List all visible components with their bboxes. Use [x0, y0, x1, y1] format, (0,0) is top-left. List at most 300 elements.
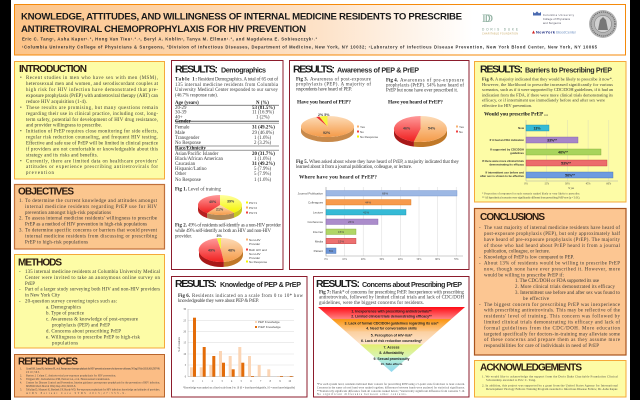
figure 8 caption: effective for HIV prevention.: [482, 103, 532, 108]
pie chart: heard of PrEP: Have you heard of PrEP?: [388, 100, 443, 106]
introduction bullets: strategy and its risks and benefits.: [26, 153, 98, 158]
references list: 3.: [20, 378, 22, 381]
pie chart: heard of PEP: Yes: [360, 125, 365, 129]
bar chart: knowledge scale: 20: [183, 330, 187, 334]
pie chart: heard of PEP: No: [360, 130, 364, 134]
introduction bullets: attitudes or experience prescribing antiretrovirals for: [26, 165, 158, 170]
heading: results concerns: [316, 278, 462, 290]
table 1 demographics: 11 (16.9%): [252, 110, 274, 116]
methods list: a. Demographics: [46, 306, 81, 310]
pie chart: heard of PrEP: 46%: [403, 126, 411, 130]
figure 3 caption: [296, 78, 371, 92]
logo: university seal: [589, 10, 617, 38]
bar chart: where heard of PrEP: Patient: [314, 249, 323, 253]
logo: Columbia: and Surgeons: [543, 22, 562, 25]
bar chart: would prescribe PrEP: % yes: [568, 187, 574, 190]
bar chart: would prescribe PrEP: [480, 112, 618, 200]
heading: methods: METHODS: [18, 258, 62, 268]
figure 2 caption: Fig 2.: [175, 224, 187, 228]
bar chart: where heard of PrEP: Journal Publication: [298, 192, 323, 196]
panel: results barriers: [474, 62, 626, 202]
acknowledgements text: Scholarship awarded to Eric C. Tang.: [486, 378, 536, 382]
conclusions text: About 13% of residents would be willing to prescribe PrEP: [484, 262, 620, 266]
figure 8 caption: [482, 76, 614, 108]
conclusions text: residents' level of training. This concern was followed by: [484, 315, 621, 320]
table 1 demographics: Caucasian: [175, 162, 196, 167]
methods list: 135 internal medicine residents at Columbia University Medical: [25, 270, 161, 275]
panel: methods: [14, 254, 164, 348]
heading: results awareness: RESULTS:: [293, 64, 335, 76]
heading: results demographics: [175, 64, 266, 76]
objectives list: prevention amongst high-risk populations: [25, 211, 111, 216]
bar chart: where heard of PrEP: Colleagues: [308, 200, 323, 204]
table 1 demographics: N (%): [256, 101, 269, 106]
heading: results barriers: RESULTS:: [480, 64, 523, 76]
panel: acknowledgements: [474, 360, 626, 397]
panel: references: [14, 354, 164, 397]
figure 7 footnote: *For each system level, residents indicated their concern for prescribing PrEP using a 5-point scale from most to least concern.: [317, 383, 465, 386]
table 1 caption: [175, 78, 279, 98]
conclusions text: The vast majority of internal medicine residents have heard of: [484, 226, 620, 231]
introduction bullets: Initiation of PrEP requires close monitoring for side effects,: [26, 130, 158, 134]
introduction bullets: Recent studies in men who have sex with men (MSM),: [26, 76, 158, 81]
bar chart: where heard of PrEP: 44%: [365, 200, 371, 204]
heading: acknowledgements: ACKNOWLEDGEMENTS: [480, 362, 582, 374]
funnel: ranked concerns: 1. Inexperience with prescribing antiretrovirals**: [351, 310, 432, 314]
conclusions text: 2. More clinical trials demonstrated its efficacy: [515, 285, 616, 290]
table 1 demographics: 5 (7.9%): [254, 172, 271, 177]
pie chart: level of training: [198, 195, 257, 220]
panel: introduction: [14, 62, 164, 179]
heading: conclusions: CONCLUSIONS: [480, 212, 545, 223]
methods list: d. Concerns about prescribing PrEP: [46, 330, 121, 334]
references list: 4.: [20, 382, 22, 384]
references list: [20, 368, 160, 395]
bar chart: knowledge scale: 5: [185, 364, 187, 367]
references list: 2.: [20, 374, 22, 378]
introduction bullets: reduce HIV acquisition (1-4).: [26, 100, 87, 105]
bar chart: would prescribe PrEP: 33%**: [547, 138, 558, 142]
bar chart: where heard of PrEP: 15%: [338, 239, 344, 243]
table 1 demographics: Gender: [175, 120, 192, 124]
bar chart: would prescribe PrEP: 46%**: [558, 150, 568, 154]
objectives list: [19, 199, 158, 246]
funnel: ranked concerns: 5. Perception of HIV-risk*: [371, 334, 413, 338]
introduction bullets: •: [20, 76, 22, 81]
table 1 demographics: Black/African American: [175, 157, 223, 162]
heading: results concerns: RESULTS:: [316, 278, 360, 290]
figure 3 caption: prophylaxis (PEP). A majority of: [296, 82, 371, 88]
conclusions text: [479, 226, 621, 349]
figure 6 caption: Fig 6.: [178, 294, 190, 299]
introduction bullets: and provider willingness to prescribe.: [26, 124, 102, 129]
funnel: ranked concerns: 7. Access: [383, 346, 400, 350]
authors: Eric C. Tang¹, Asha Kapur¹˒², Hong Van Tieu¹˒²˒³, Beryl A. Koblin³, Tanya M. Ellman¹˒², and Magdalena E. Sobieszczyk¹˒²: [22, 36, 318, 42]
figure 2 caption: 49% of residents self-identify as a non-HIV provider: [188, 224, 281, 228]
logo: Doris Duke: [482, 11, 518, 36]
funnel: ranked concerns: [318, 307, 465, 372]
panel: results awareness: [290, 60, 469, 270]
pie chart: heard of PrEP: No: [459, 130, 463, 134]
bar chart: where heard of PrEP: Internet: [313, 230, 323, 234]
heading: results demographics: Demographics: [221, 66, 266, 74]
table 1 demographics: Male: [175, 131, 185, 136]
conclusions text: The biggest concern for prescribing PrEP was inexperience: [484, 303, 620, 308]
table 1 caption: (46.7% response rate).: [175, 93, 218, 98]
bar chart: knowledge scale: 5: [241, 380, 243, 383]
pie chart: provider type: Provider: [249, 242, 260, 246]
bar chart: knowledge scale: 3: [221, 380, 223, 383]
pie chart: heard of PrEP: 54%: [428, 126, 436, 130]
figure 2 caption: provider.: [175, 234, 192, 240]
panel: conclusions: [474, 208, 626, 355]
introduction bullets: •: [20, 130, 22, 134]
references list: Grant RM, Lama JR, Anderson PL, et al. Preexposure chemoprophylaxis for HIV prevention in men who have sex with men. N Engl J Med 2010;363:2587-99.: [26, 368, 160, 370]
panel: results demographics: [172, 60, 283, 270]
panel: objectives: [14, 184, 164, 249]
conclusions text: of these concerns and prepare them as they assume more: [484, 338, 620, 343]
table 1 demographics: No Response: [175, 141, 201, 146]
conclusions text: be effective: [523, 297, 549, 302]
pie chart: provider type: 3%: [216, 234, 222, 238]
figure 7 footnote: [317, 383, 465, 396]
conclusions text: with prescribing antiretrovirals. This may be reflective of the: [484, 309, 620, 314]
figure 4 caption: prophylaxis (PrEP). 54% have heard of: [386, 84, 464, 88]
methods list: populations: [52, 342, 78, 346]
bar chart: would prescribe PrEP: 13%: [533, 126, 541, 130]
figure 4 caption: [386, 78, 464, 94]
objectives list: 2.: [19, 217, 23, 222]
introduction bullets: These results are promising, but many questions remain: [26, 106, 159, 111]
objectives list: PrEP to high-risk populations: [25, 240, 88, 246]
pie chart: heard of PEP: 2% 5%: [318, 113, 330, 117]
figure 8 caption: Fig 8.: [482, 76, 494, 82]
methods list: in New York City: [25, 294, 61, 299]
bar chart: would prescribe PrEP: If intermittent use before and: [485, 170, 524, 174]
objectives list: internal medicine residents from discussing or prescribing: [25, 234, 158, 240]
table 1 demographics: Asian/Pacific Islander: [175, 152, 219, 157]
table 1 caption: University Medical Center responded to our survey: [175, 88, 279, 93]
funnel: ranked concerns: 6. Lack of risk reduction counseling*: [361, 339, 423, 343]
references list: Baeten J, Celum C. Antiretroviral pre-exposure prophylaxis for HIV prevention.: [26, 374, 116, 378]
pie chart: provider type: Both HIV and: [249, 248, 267, 252]
bar chart: knowledge scale: 10: [288, 380, 292, 383]
references list: Thigpen MC, Kebaabetswe PM, Paxton LA, et al. Heterosexual transmission.: [26, 378, 110, 381]
bar chart: where heard of PrEP: Media: [315, 239, 323, 243]
conclusions text: now, though none have ever prescribed it. However, more: [484, 267, 620, 272]
figure 3 caption: Fig 3.: [296, 78, 308, 82]
table 1 demographics: 31 (49.2%): [252, 126, 275, 130]
objectives list: To determine the current knowledge and attitudes amongst: [25, 199, 158, 204]
bar chart: knowledge scale: 1: [202, 380, 204, 383]
conclusions text: formal guidelines from the CDC/DOH. More education: [484, 326, 621, 331]
bar chart: knowledge scale: 8: [270, 380, 272, 383]
bar chart: would prescribe PrEP: after sex is shown to be effective: [480, 174, 524, 178]
funnel: ranked concerns: 4. Need for conversation skills: [366, 326, 417, 330]
table 1 demographics: 30-39: [175, 110, 187, 116]
bar chart: would prescribe PrEP: If there were more clinical trials: [482, 159, 524, 163]
bar chart: where heard of PrEP: 20%: [361, 258, 366, 261]
references list: 1.: [20, 368, 22, 370]
logo: New York Blood Center: BloodCenter: [556, 30, 577, 34]
bar chart: where heard of PrEP: 68%: [382, 192, 388, 196]
panel: results concerns: [314, 276, 469, 397]
bar chart: knowledge scale: 30: [183, 308, 187, 311]
bar chart: would prescribe PrEP: If it had an FDA indication: [490, 138, 524, 142]
table 1 caption: Table 1:: [175, 78, 197, 82]
table 1 demographics: Transgender: [175, 136, 200, 141]
bar chart: where heard of PrEP: 30%: [379, 258, 385, 261]
pie chart: heard of PrEP: Yes: [459, 125, 464, 129]
objectives list: To determine specific concerns or barriers that would prevent: [25, 228, 158, 234]
bar chart: knowledge scale: 10: [183, 353, 187, 356]
table 1 demographics: 40+: [175, 116, 183, 120]
heading: results knowledge: RESULTS:: [175, 278, 217, 290]
bar chart: where heard of PrEP: Where have you heard of PrEP?: [299, 174, 377, 180]
bar chart: where heard of PrEP: 40%: [398, 258, 404, 261]
figure 3 caption: respondents have heard of PEP.: [296, 88, 352, 92]
figure 5 caption: When asked about where they have heard of PrEP, a majority indicated that they: [309, 160, 460, 165]
heading: results concerns: Concerns about Prescribing PrEP: [362, 280, 462, 289]
logo: New York Blood Center: NewYork: [536, 30, 556, 34]
conclusions text: -: [479, 303, 481, 308]
figure 1 caption: Level of training: [188, 188, 222, 192]
logo: Columbia: [533, 11, 575, 25]
bar chart: where heard of PrEP: 10%: [342, 258, 348, 261]
funnel: ranked concerns: 8. Affordability: [379, 351, 404, 355]
bar chart: knowledge scale: 7: [260, 380, 262, 383]
table 1 demographics: 1 (1.6%): [254, 157, 271, 162]
pie chart: level of training: PGY3: [249, 211, 257, 215]
bar chart: would prescribe PrEP: ** All hypothetical scenarios were significantly different from prescribing PrEP now (p < 0.01).: [482, 196, 580, 200]
heading: results awareness: [293, 64, 419, 76]
figure 8 caption: However, the likelihood to prescribe increased significantly for various: [482, 82, 613, 88]
bar chart: would prescribe PrEP: 0%: [524, 182, 529, 186]
table 1 demographics: 31 (49.2%): [252, 162, 275, 167]
conclusions text: -: [479, 262, 481, 266]
pie chart: provider type: Provider: [249, 256, 260, 260]
figure 7 footnote: No significant difference between other concerns.: [317, 393, 407, 396]
methods list: -: [19, 270, 21, 275]
bar chart: knowledge scale: 0: [192, 380, 194, 383]
table 1 demographics: Age (years): [175, 101, 199, 106]
introduction bullets: if providers are not comfortable or knowledgeable about this: [26, 147, 158, 152]
bar chart: where heard of PrEP: 70%: [454, 258, 459, 261]
bar chart: knowledge scale: 6: [250, 380, 252, 383]
objectives list: PrEP as a method of HIV prevention in high-risk populations: [25, 223, 147, 228]
figure 6 caption: Residents indicated on a scale from 0 to 10* how: [192, 294, 303, 299]
bar chart: where heard of PrEP: 60%: [435, 258, 441, 261]
acknowledgements text: 1. We would like to acknowledge the support from the Doris Duke Charitable Foundation Clinical: [482, 374, 618, 378]
pie chart: level of training: PGY2: [249, 206, 257, 210]
objectives list: 1.: [19, 199, 23, 204]
bar chart: would prescribe PrEP: 56%**: [565, 174, 576, 178]
figure 8 caption: efficacy, or if intermittent use immediately before and after sex were: [482, 98, 605, 104]
bar chart: would prescribe PrEP: 53%**: [561, 162, 572, 166]
methods list: Center were invited to take an anonymous online survey on: [25, 276, 161, 281]
bar chart: knowledge scale: % of residents: [178, 337, 181, 352]
bar chart: where heard of PrEP: 41%: [363, 210, 369, 214]
table 1 demographics: 1 (1.6%): [254, 178, 271, 183]
bar chart: would prescribe PrEP: demonstrating its efficacy: [489, 162, 524, 166]
figure 6 caption: [178, 294, 303, 304]
objectives list: internal medicine residents regarding PrEP use for HIV: [25, 205, 157, 210]
bar chart: knowledge scale: *Knowledge was ranked on a fixed scale from 0 to 10 (0 = least knowledgeable, 10 = most knowledgeable): [183, 386, 295, 390]
heading: objectives: OBJECTIVES: [18, 186, 74, 198]
conclusions text: 1. The CDC/DOH or FDA supported its use: [515, 279, 599, 284]
table 1 caption: 135 internal medicine residents from Columbia: [175, 83, 279, 88]
logo: Columbia: Columbia University: [543, 14, 575, 17]
figure 5 caption: Fig 5.: [296, 160, 308, 165]
bar chart: knowledge scale: 0: [185, 376, 187, 378]
figure 7 footnote: **Statistically significant difference from all concerns ranked below; *statistically significant difference from concerns 7-10.: [317, 390, 465, 393]
figure 7 caption: [319, 290, 465, 306]
pie chart: provider type: [199, 234, 268, 267]
heading: results awareness: Awareness of PEP & PrEP: [337, 66, 419, 74]
figure 7 caption: antiretrovirals, followed by limited clinical trials and lack of CDC/DOH: [319, 296, 464, 300]
heading: results demographics: RESULTS:: [175, 64, 218, 76]
table 1 demographics: Other: [175, 172, 187, 177]
figure 2 caption: [175, 224, 281, 240]
methods list: Part of a larger study surveying both HIV and non-HIV providers: [25, 288, 160, 293]
funnel: ranked concerns: 9. Sexual promiscuity: [374, 357, 410, 361]
table 1 demographics: 1 (2%): [256, 116, 270, 120]
figure 7 caption: Fig 7:: [319, 290, 331, 296]
table 1 demographics: [175, 101, 279, 183]
pie chart: provider type: 48%: [228, 248, 236, 252]
conclusions text: 3. Intermittent use before and after sex was found to: [515, 291, 621, 296]
acknowledgements text: Development Virology Fellows Training Program awarded to Infectious Disease Fellow, Dr. Asha Kapur.: [486, 387, 618, 392]
pie chart: level of training: 39%: [227, 200, 235, 204]
figure 8 caption: A majority indicated that they would be likely to prescribe it now*.: [495, 76, 613, 82]
figure 5 caption: learned about it from a journal publication, colleague, or lecture.: [296, 165, 412, 170]
bar chart: knowledge scale: 2: [212, 380, 214, 383]
methods list: c. Awareness & knowledge of post-exposure: [46, 318, 138, 322]
references list: Tellalian D, Maznavi K, Bredeek UF, Hardy WD. Pre-exposure prophylaxis for HIV infection: knowledge and attitudes of providers.: [26, 388, 160, 392]
figure 5 caption: [296, 160, 460, 170]
heading: references: REFERENCES: [18, 356, 78, 368]
table 1 demographics: Race/Ethnicity: [175, 146, 207, 151]
introduction bullets: Effective and safe use of PrEP will be limited in clinical practice: [26, 141, 158, 146]
title: KNOWLEDGE, ATTITUDES, AND WILLINGNESS OF INTERNAL MEDICINE RESIDENTS TO PRESCRIBE: [21, 12, 463, 22]
bar chart: would prescribe PrEP: 45%: [586, 182, 591, 186]
conclusions text: responsibilities for care of individuals in need of PrEP: [484, 344, 599, 349]
methods list: b. Type of practice: [46, 312, 84, 316]
references list: Centers for Disease Control and Prevention. Interim guidance: preexposure prophylaxis for the prevention of HIV infection.: [26, 382, 160, 384]
introduction bullets: high risk for HIV infection have demonstrated that pre-: [26, 88, 158, 93]
table 1 demographics: 53 (81.5%): [252, 106, 275, 111]
conclusions text: publication, colleague, or lecture.: [484, 250, 550, 255]
table 1 demographics: 29 (46.0%): [252, 131, 274, 136]
bar chart: knowledge scale: 4: [231, 380, 233, 383]
affiliations: ¹Columbia University College of Physicians & Surgeons, ²Division of Infectious Diseases, Department of Medicine, New York, NY 10032; ³Laboratory of Infectious Disease Prevention, New York Blood Center, New York, NY 10065: [22, 44, 598, 49]
bar chart: where heard of PrEP: 15%: [338, 230, 344, 234]
bar chart: knowledge scale: [178, 308, 295, 390]
bar chart: knowledge scale: 25: [183, 320, 187, 322]
bar chart: where heard of PrEP: 26%: [348, 220, 354, 224]
heading: results barriers: Barriers to Prescribing PrEP: [525, 66, 612, 74]
bar chart: would prescribe PrEP: 30%: [565, 182, 571, 186]
introduction bullets: Currently, there are limited data on healthcare providers': [26, 159, 158, 164]
acknowledgements text: 2. In addition, this project was supported by a grant from the United States Agency for International: [482, 384, 618, 388]
header banner: [14, 4, 626, 55]
bar chart: would prescribe PrEP: 15%: [544, 182, 550, 186]
pie chart: provider type: 49%: [208, 248, 216, 252]
introduction bullets: •: [20, 159, 22, 164]
heading: introduction: INTRODUCTION: [19, 64, 87, 75]
bar chart: knowledge scale: 15: [183, 342, 187, 344]
table 1 demographics: 2 (3.2%): [254, 141, 271, 146]
table 1 demographics: 20-29: [175, 106, 187, 111]
conclusions text: would be willing to prescribe PrEP if:: [484, 273, 564, 278]
conclusions text: Knowledge of PrEP is low compared to PEP.: [484, 256, 574, 261]
bar chart: knowledge scale: PEP Knowledge: [258, 320, 280, 324]
logo: Columbia: College of Physicians: [543, 18, 571, 21]
table 1 demographics: 20 (31.7%): [252, 152, 275, 157]
bar chart: would prescribe PrEP: * Proportion of responses for each scenario ranked likely or very likely to prescribe.: [482, 192, 580, 196]
conclusions text: have heard of pre-exposure prophylaxis (PrEP). The majority: [484, 238, 621, 243]
figure 3 caption: Awareness of post-exposure: [310, 78, 371, 82]
bar chart: would prescribe PrEP: guidelines: [510, 151, 524, 155]
introduction bullets: heterosexual men and women, and serodiscordant couples at: [26, 82, 159, 87]
bar chart: would prescribe PrEP: If supported by CDC/DOH: [490, 148, 524, 152]
panel: results knowledge: [172, 276, 307, 397]
figure 2 caption: while 49% self-identify as both an HIV and non-HIV: [175, 229, 271, 234]
pie chart: heard of PEP: Have you heard of PEP?: [297, 100, 351, 106]
bar chart: where heard of PrEP: 50%: [417, 258, 422, 261]
bar chart: where heard of PrEP: 0%: [324, 258, 329, 261]
references list: MMWR Morb Mortal Wkly Rep 2011;60:65-8.: [26, 385, 76, 388]
pie chart: provider type: No Response: [249, 260, 268, 264]
conclusions text: limited clinical trials demonstrating its efficacy and lack of: [484, 320, 620, 326]
methods list: -: [19, 300, 21, 304]
pie chart: heard of PEP: 92%: [323, 131, 331, 135]
objectives list: 3.: [19, 228, 23, 234]
pie chart: heard of PrEP: [388, 100, 464, 147]
methods list: e. Willingness to prescribe PrEP to high-risk: [46, 336, 141, 340]
references list: 5.: [20, 388, 22, 392]
introduction bullets: prevention: [26, 171, 55, 176]
bar chart: knowledge scale: PrEP Knowledge: [258, 325, 281, 329]
funnel: ranked concerns: 10. Side effects: [381, 362, 403, 366]
introduction bullets: exposure prophylaxis (PrEP) with antiretroviral therapy (ART) can: [26, 94, 159, 99]
conclusions text: of those who had heard about PrEP heard it from a journal: [484, 244, 621, 249]
pie chart: provider type: Non-HIV: [249, 238, 261, 242]
figure 8 caption: scenarios, such as if it were supported by CDC/DOH guidelines, if it had an: [482, 87, 614, 93]
introduction bullets: term safety, potential for development of HIV drug resistance,: [26, 118, 158, 123]
figure 1 caption: Fig 1.: [175, 188, 187, 192]
figure 4 caption: Awareness of pre-exposure: [400, 78, 464, 84]
logo: New York Blood Center: [532, 30, 577, 34]
heading: results knowledge: [175, 278, 301, 290]
objectives list: To assess internal medicine residents' willingness to prescribe: [25, 217, 157, 222]
pie chart: provider type: Non-HIV: [249, 252, 261, 256]
figure 6 caption: knowledgeable they were about PEP & PrEP.: [178, 299, 259, 304]
table 1 demographics: 5 (7.9%): [254, 167, 271, 172]
bar chart: where heard of PrEP: 5%: [329, 249, 333, 253]
figure 7 footnote: Concerns in the same colored band were ranked together; differences between bands were analysed for statistical significance.: [317, 386, 465, 390]
table 1 demographics: Female: [175, 126, 189, 130]
table 1 demographics: 1 (1.6%): [254, 136, 271, 141]
pie chart: heard of PEP: No Response: [360, 135, 379, 139]
conclusions text: targeted specifically for doctors-in-training may alleviate some: [484, 332, 620, 337]
references list: 2010;363.: [26, 371, 40, 374]
heading: results barriers: [480, 64, 612, 76]
figure 4 caption: Fig 4.: [386, 78, 398, 84]
pie chart: heard of PEP: [297, 100, 379, 142]
acknowledgements text: [482, 374, 618, 392]
conclusions text: -: [479, 256, 481, 261]
